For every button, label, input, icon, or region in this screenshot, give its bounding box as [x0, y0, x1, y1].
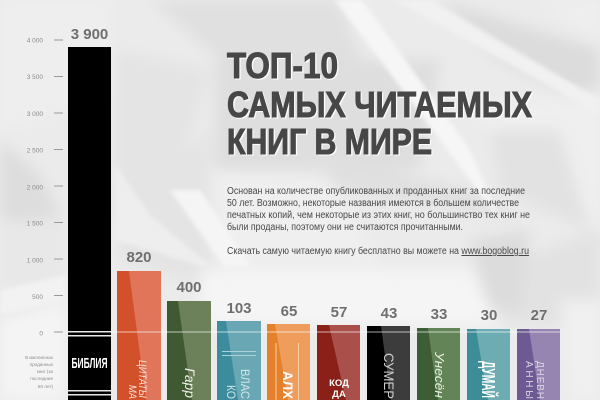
axis unit note: книг (за: [37, 369, 53, 374]
value 27: 27: [531, 307, 547, 324]
value 43: 43: [381, 305, 397, 322]
value 33: 33: [431, 306, 447, 323]
tick label 3500: 3 500: [27, 74, 43, 81]
value 57: 57: [331, 304, 347, 321]
value 65: 65: [281, 303, 297, 320]
title: КНИГ В МИРЕ: [228, 122, 433, 163]
y axis scale: [27, 38, 63, 338]
description text: печатных копий, чем некоторые из этих книг, но большинство тех книг не: [227, 209, 530, 221]
title: ТОП-10: [228, 46, 339, 87]
tick label 0: 0: [39, 330, 43, 338]
spine title: АННЫ: [523, 361, 534, 399]
value 3900: 3 900: [71, 26, 108, 43]
title: [227, 45, 533, 163]
spine title: БИБЛИЯ: [72, 355, 108, 372]
book: Властелин колец: [217, 300, 261, 400]
book: Дневник Анны Франк: [517, 307, 560, 400]
book: Библия: [68, 26, 111, 400]
spine title: ДА: [332, 389, 346, 400]
spine title: Гарр: [182, 368, 198, 398]
book: Унесённые ветром: [417, 306, 460, 400]
book: Алхимик: [267, 303, 310, 400]
spine title: [523, 361, 545, 399]
tick label 500: 500: [32, 294, 43, 301]
spine title: [126, 360, 148, 399]
description text: Основан на количестве опубликованных и проданных книг за последние: [227, 185, 525, 197]
tick label 1500: 1 500: [27, 220, 43, 228]
book: Код да Винчи: [317, 304, 360, 400]
book: Сумерки: [367, 305, 410, 400]
title: САМЫХ ЧИТАЕМЫХ: [227, 84, 532, 125]
axis unit note: проданных: [30, 362, 54, 367]
spine title: КОД: [329, 378, 349, 389]
axis unit note: В миллионах: [25, 355, 54, 360]
value 103: 103: [226, 300, 252, 317]
axis unit note: [25, 355, 54, 389]
spine title: [329, 378, 349, 400]
tick label 3000: 3 000: [27, 111, 43, 118]
tick label 2000: 2 000: [27, 184, 43, 192]
spine title: [224, 369, 252, 399]
tick label 2500: 2 500: [27, 148, 43, 154]
spine title: ДНЕВН: [534, 361, 545, 399]
book: Гарри Поттер: [167, 279, 211, 400]
tick label 4000: 4 000: [27, 38, 43, 44]
spine title: Унесён: [432, 351, 447, 398]
book: Думай и богатей: [467, 307, 510, 400]
axis unit note: последние: [30, 376, 53, 381]
description text: 50 лет. Возможно, некоторые названия имеются в большем количестве: [227, 197, 519, 209]
description text: были проданы, поэтому они не считаются прочитанными.: [227, 221, 463, 233]
title: ТОП-10: [227, 45, 338, 86]
spine title: АЛХ: [280, 371, 296, 400]
value 400: 400: [176, 279, 202, 296]
zero baseline: [111, 332, 560, 333]
title: КНИГ В МИРЕ: [227, 121, 432, 162]
title: САМЫХ ЧИТАЕМЫХ: [228, 85, 533, 126]
axis unit note: 50 лет): [38, 384, 53, 389]
value 30: 30: [481, 307, 497, 324]
description text: [227, 185, 530, 257]
description text: Скачать самую читаемую книгу бесплатно вы можете на www.bogoblog.ru: [227, 245, 529, 257]
value 820: 820: [126, 249, 152, 266]
book: Цитаты Мао: [117, 249, 161, 400]
tick label 1000: 1 000: [27, 258, 43, 264]
